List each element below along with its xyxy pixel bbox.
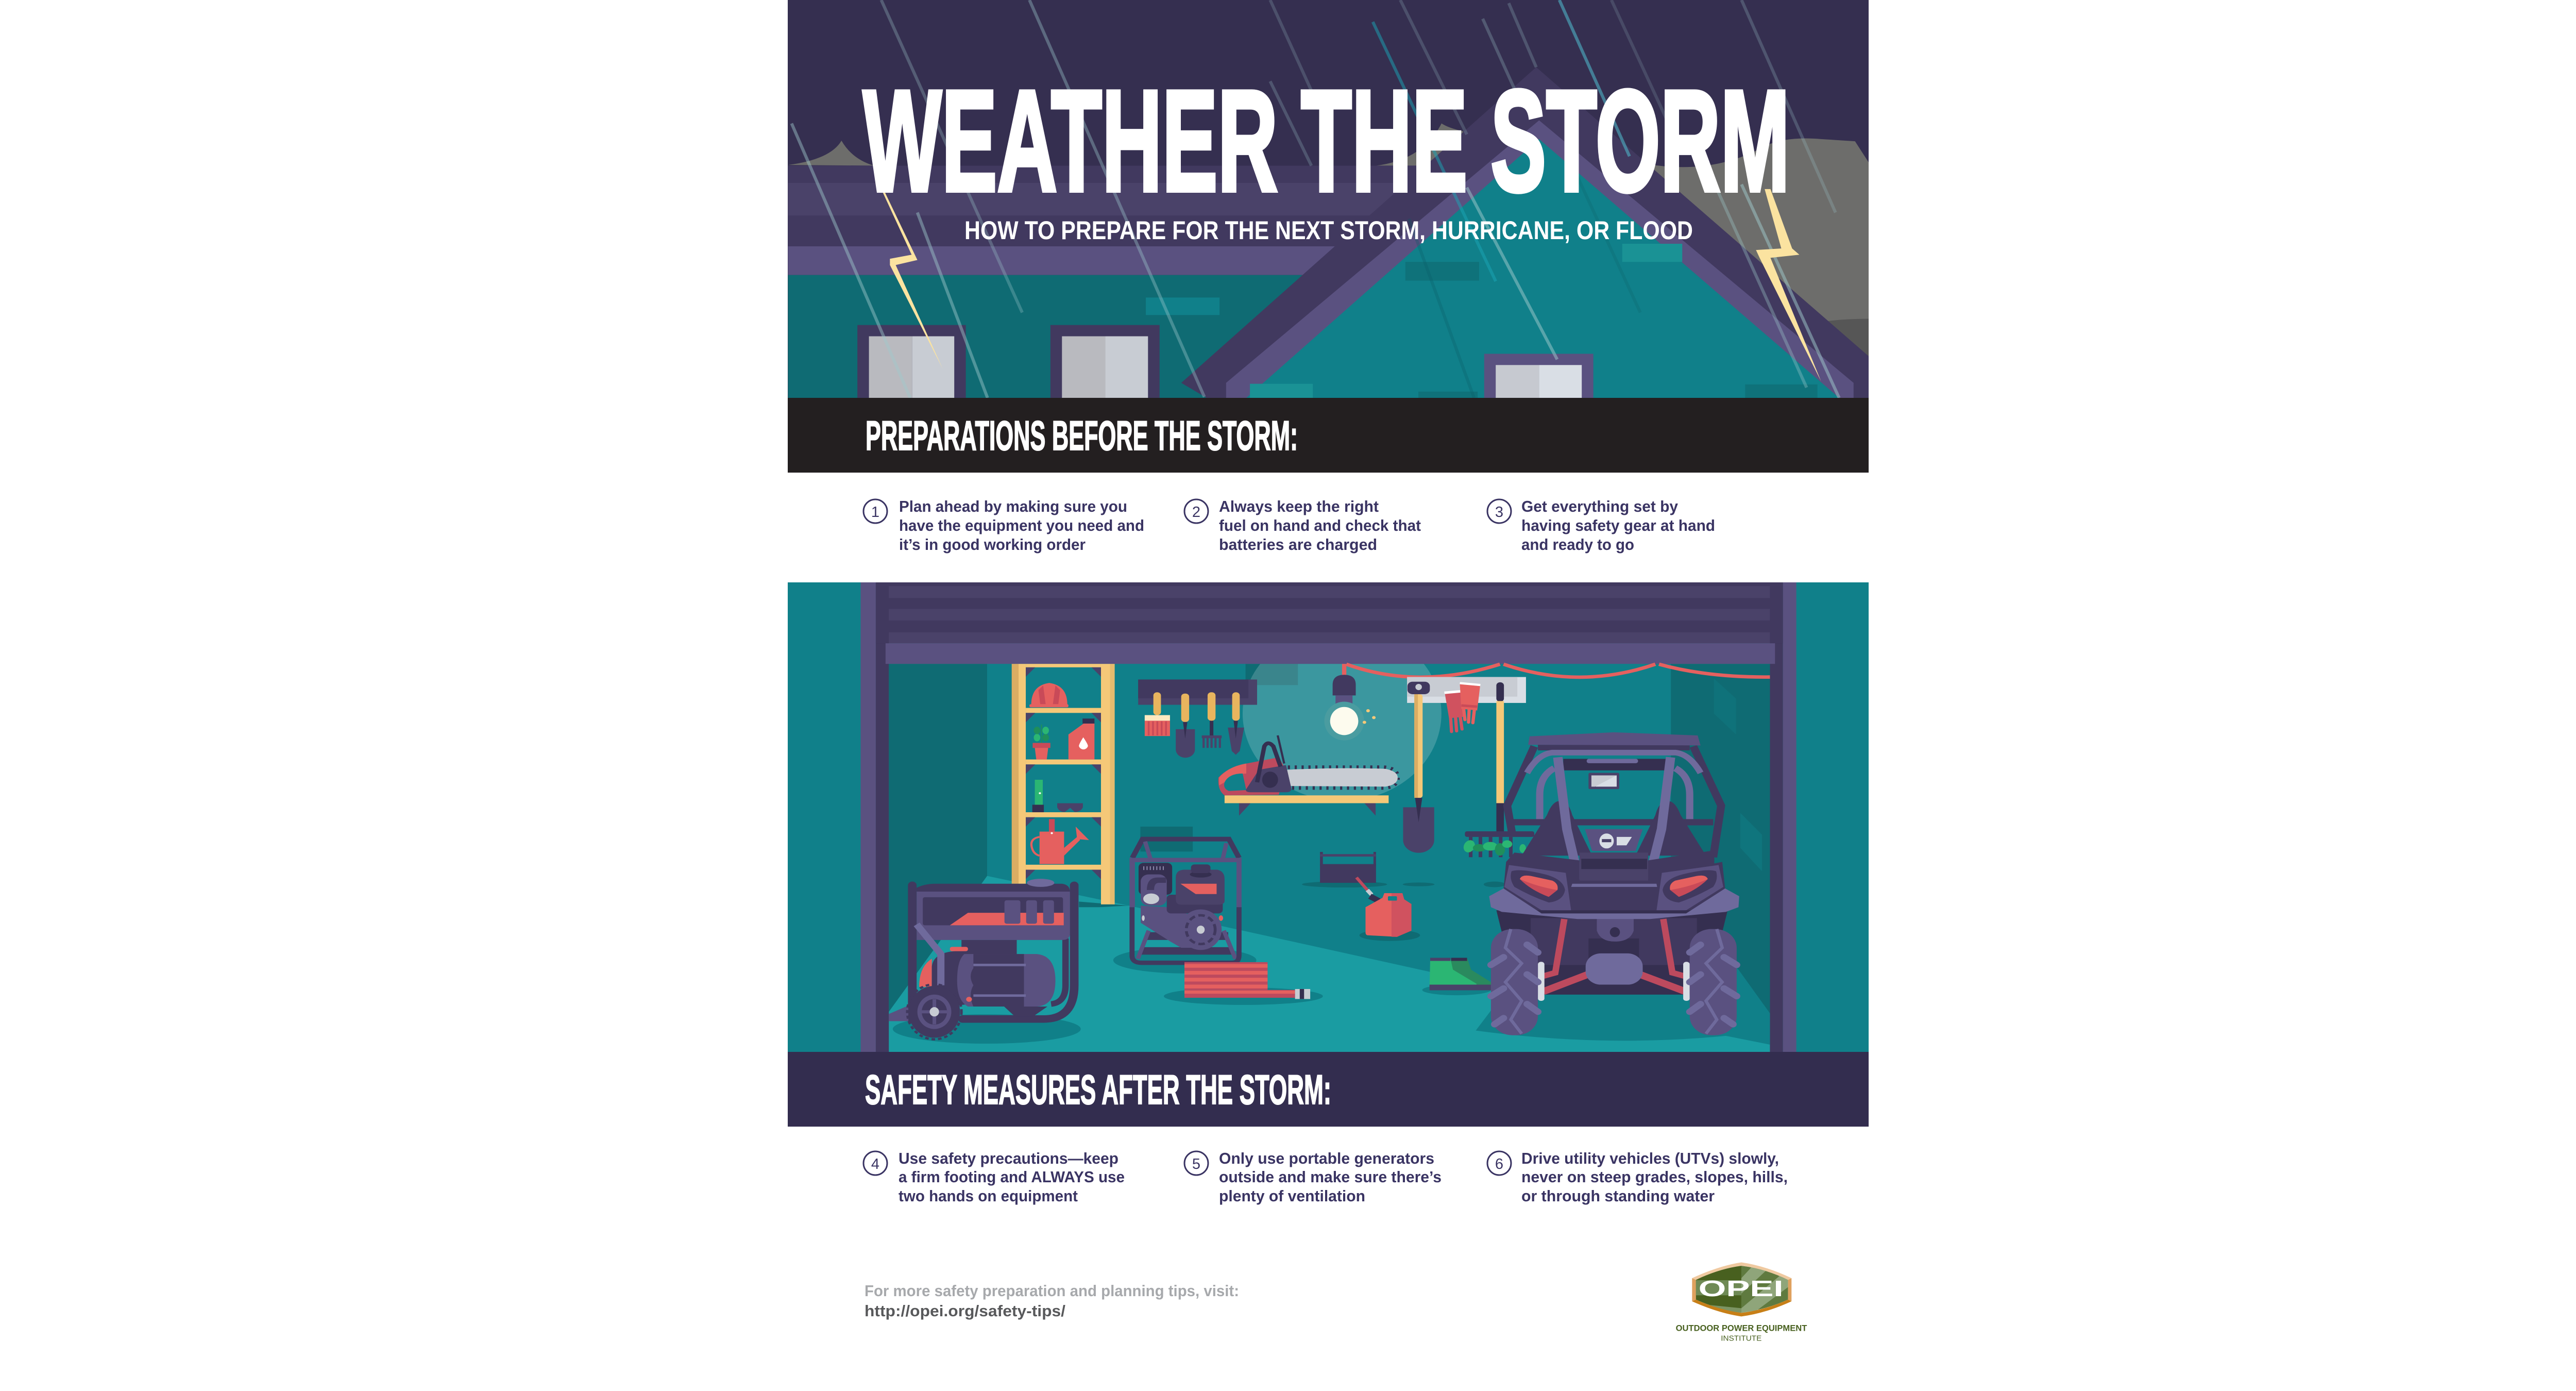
- icon: flashlight: [1032, 780, 1044, 812]
- icon: paint brush: [1145, 692, 1170, 736]
- icon: garden rake: [1462, 682, 1534, 857]
- step 2: 2: [1192, 504, 1200, 521]
- step 2: batteries are charged: [1219, 535, 1377, 554]
- utv cage and roof: [1507, 732, 1721, 882]
- shelving unit: [1012, 664, 1115, 904]
- utility vehicle: [1476, 732, 1770, 1045]
- footer note: [865, 1282, 1239, 1320]
- icon: toolbox: [1302, 852, 1505, 887]
- step 4: [863, 1149, 1125, 1205]
- wall shelf: [1225, 795, 1388, 816]
- step 1: 1: [871, 504, 879, 521]
- heading: safety measures: SAFETY MEASURES AFTER THE STORM:: [865, 1067, 1331, 1113]
- panel: garage illustration: [788, 582, 1872, 1052]
- utv wheels: [1491, 929, 1737, 1035]
- step 2: fuel on hand and check that: [1219, 516, 1421, 534]
- step 5: 5: [1192, 1156, 1200, 1172]
- logo subname: INSTITUTE: [1721, 1335, 1762, 1343]
- heading: preparations: PREPARATIONS BEFORE THE STORM:: [866, 413, 1298, 459]
- step 6: 6: [1495, 1156, 1503, 1172]
- footer note: For more safety preparation and planning tips, visit:: [865, 1282, 1239, 1300]
- light glow: [1243, 626, 1442, 801]
- large portable generator: [889, 879, 1081, 1044]
- logo name: OUTDOOR POWER EQUIPMENT: [1676, 1323, 1807, 1333]
- storm clouds: [788, 124, 1869, 358]
- left lightning bolt: [883, 192, 943, 369]
- icon: transplant spade: [1228, 692, 1244, 755]
- utv rear body: [1503, 850, 1725, 915]
- step 4: 4: [871, 1156, 879, 1172]
- step 2: [1184, 497, 1421, 554]
- step 3: and ready to go: [1521, 535, 1634, 554]
- icon: gas can: [1357, 878, 1420, 941]
- step 5: Only use portable generators: [1219, 1149, 1434, 1167]
- logo letters: OPEI: [1699, 1277, 1784, 1301]
- panel: safety measures heading band: [788, 1052, 1869, 1127]
- step 3: Get everything set by: [1521, 497, 1679, 515]
- step 1: it’s in good working order: [899, 535, 1086, 554]
- panel: storm hero illustration: [788, 0, 1869, 398]
- gable window: [1484, 354, 1594, 398]
- step 3: having safety gear at hand: [1521, 516, 1715, 534]
- small portable generator: [1113, 839, 1257, 974]
- panel: preparations heading band: [788, 398, 1869, 473]
- tool hanger rail: [1407, 677, 1526, 703]
- icon: safety goggles: [1057, 803, 1083, 812]
- gable roof: [1181, 67, 1869, 398]
- icon: hard hat: [1029, 683, 1069, 707]
- utv floor shadow: [1476, 969, 1770, 1045]
- garage walls and floor: [788, 582, 1872, 1052]
- icon: hanging light bulb: [1324, 664, 1376, 741]
- step 1: have the equipment you need and: [899, 516, 1144, 534]
- icon: red gloves: [1444, 682, 1481, 732]
- logo badge: [1692, 1262, 1791, 1316]
- subtitle: HOW TO PREPARE FOR THE NEXT STORM, HURRICANE, OR FLOOD: [964, 216, 1693, 245]
- step 6: never on steep grades, slopes, hills,: [1521, 1168, 1788, 1186]
- extension cord: [1346, 664, 1770, 677]
- title: WEATHER THE STORM: [863, 61, 1790, 222]
- icon: shovel: [1403, 682, 1434, 853]
- step 6: or through standing water: [1521, 1187, 1715, 1205]
- step 6: Drive utility vehicles (UTVs) slowly,: [1521, 1149, 1779, 1167]
- step 3: 3: [1495, 504, 1503, 521]
- icon: coiled hose: [1164, 962, 1323, 1005]
- icon: potted plant: [1032, 725, 1050, 760]
- middle window: [1050, 325, 1160, 398]
- house siding bands: [788, 166, 1416, 398]
- utv undercarriage: [1489, 889, 1739, 995]
- step 6: [1487, 1149, 1788, 1205]
- step 1: [863, 497, 1144, 554]
- rain streaks: [791, 0, 1839, 398]
- footer note: http://opei.org/safety-tips/: [865, 1302, 1065, 1320]
- step 5: [1184, 1149, 1442, 1205]
- step 4: Use safety precautions—keep: [899, 1149, 1118, 1167]
- icon: green boots: [1422, 958, 1491, 995]
- step 3: [1487, 497, 1715, 554]
- garage door frame: [860, 582, 1797, 1052]
- icon: oil jug: [1069, 718, 1094, 760]
- icon: hand trowel: [1176, 694, 1195, 758]
- step 5: outside and make sure there’s: [1219, 1168, 1442, 1186]
- icon: hand rake: [1202, 692, 1222, 748]
- step 5: plenty of ventilation: [1219, 1187, 1365, 1205]
- step 1: Plan ahead by making sure you: [899, 497, 1127, 515]
- right lightning bolt: [1756, 189, 1821, 381]
- tool pegboard: [1138, 679, 1257, 705]
- left window: [857, 325, 966, 398]
- step 2: Always keep the right: [1219, 497, 1379, 515]
- step 4: two hands on equipment: [899, 1187, 1078, 1205]
- icon: chainsaw: [1218, 735, 1398, 795]
- step 4: a firm footing and ALWAYS use: [899, 1168, 1125, 1186]
- icon: watering can: [1031, 819, 1089, 864]
- OPEI logo: [1676, 1262, 1807, 1343]
